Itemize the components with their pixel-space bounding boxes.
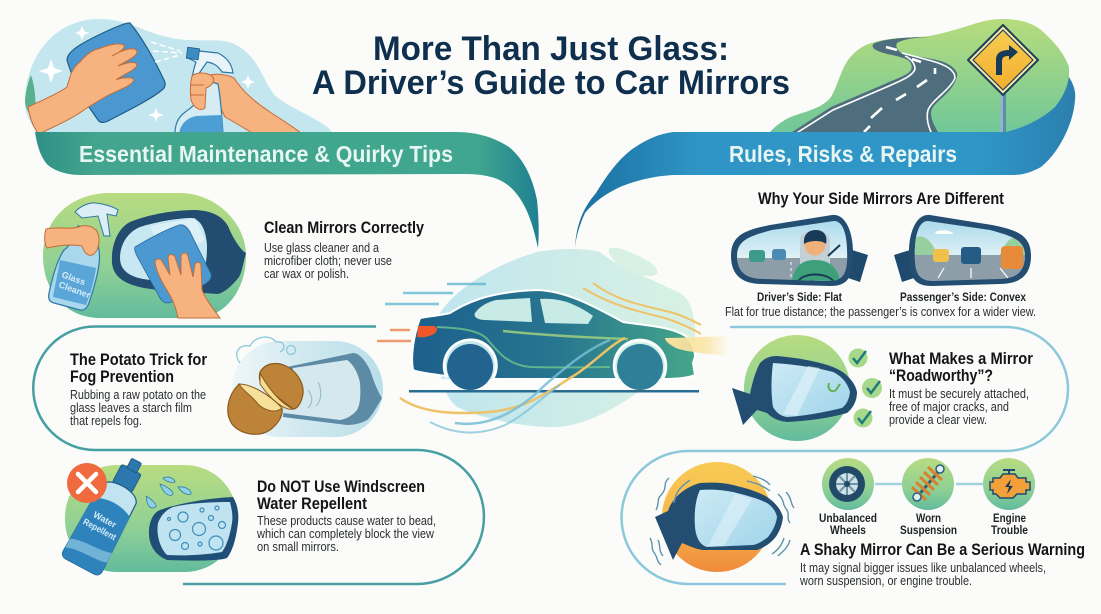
potato half lower <box>228 384 282 434</box>
icon captions: Engine <box>993 511 1026 525</box>
illustration: shaking mirror <box>650 462 794 572</box>
cleaning hand <box>155 253 220 318</box>
mirror <box>112 210 246 294</box>
heading and text <box>264 219 425 281</box>
heading and text <box>799 541 1085 588</box>
potato half upper <box>259 364 303 409</box>
spray mist and sparkles <box>39 26 255 122</box>
heading and text: that repels fog. <box>70 413 142 428</box>
icon captions: Unbalanced <box>819 511 877 525</box>
heading and text: It must be securely attached, <box>889 386 1029 401</box>
heading and text <box>70 351 208 428</box>
heading and text: Clean Mirrors Correctly <box>264 219 425 237</box>
road sign <box>968 25 1038 134</box>
heading and text: Rubbing a raw potato on the <box>70 387 206 402</box>
flowing swooshes <box>400 338 625 413</box>
heading and text: Use glass cleaner and a <box>264 240 380 255</box>
illustration: cleaning a mirror: Cleaner <box>57 279 92 300</box>
repellent bottle: Repellent <box>81 517 118 542</box>
repellent bottle <box>61 450 156 577</box>
connector lines <box>875 483 983 485</box>
heading and text: Water Repellent <box>257 495 367 513</box>
illustration: cleaning a mirror <box>43 193 246 318</box>
body stripes <box>437 327 610 367</box>
holding hand <box>45 226 99 255</box>
heading and text: which can completely block the view <box>256 526 435 541</box>
icon captions: Suspension <box>900 523 957 537</box>
heading and text: What Makes a Mirror <box>889 350 1034 368</box>
heading and text: Do NOT Use Windscreen <box>257 478 425 496</box>
main title <box>312 30 790 102</box>
spray bottle with hand <box>175 47 302 134</box>
main title: More Than Just Glass: <box>373 30 729 68</box>
icon: worn suspension <box>902 458 954 510</box>
panel: windscreen water repellent warning <box>61 450 436 577</box>
icon: engine trouble <box>983 458 1035 510</box>
driver side mirror <box>731 215 868 286</box>
panel: shaky mirror <box>650 458 1085 588</box>
panel: potato trick <box>33 326 484 584</box>
heading and text: The Potato Trick for <box>70 351 208 369</box>
speed lines <box>385 284 486 304</box>
blue cloth <box>135 225 211 303</box>
icon: unbalanced wheel <box>822 458 874 510</box>
tail light <box>417 326 437 337</box>
heading and text: It may signal bigger issues like unbalanced wheels, <box>800 560 1046 575</box>
central car illustration <box>377 248 730 433</box>
headlight beam <box>665 336 730 356</box>
banner: rules risks repairs: Rules, Risks & Repairs <box>729 141 957 167</box>
car body <box>412 290 695 379</box>
heading and text: These products cause water to bead, <box>257 513 436 528</box>
illustration: hands cleaning with cloth and spray <box>25 19 333 134</box>
mirror captions: Passenger’s Side: Convex <box>900 290 1026 304</box>
banner: essential maintenance: Essential Maintenance & Quirky Tips <box>79 141 453 167</box>
banner: rules risks repairs <box>575 77 1075 248</box>
panel: roadworthy <box>622 327 1068 584</box>
water drops and mist <box>146 477 191 509</box>
ground line <box>409 390 699 392</box>
illustration: repellent bottle and beaded mirror <box>61 450 238 577</box>
icon: red cross warning <box>67 463 107 503</box>
illustration: cleaning a mirror: Glass <box>60 269 87 287</box>
mirror captions: Driver’s Side: Flat <box>757 290 842 304</box>
heading and text: on small mirrors. <box>257 539 339 554</box>
illustration: roadworthy mirror with checks <box>732 335 882 441</box>
heading: Why Your Side Mirrors Are Different <box>758 190 1004 208</box>
road <box>789 37 957 134</box>
glass cleaner bottle <box>49 226 100 310</box>
heading and text: provide a clear view. <box>889 412 987 427</box>
illustration: potato on mirror <box>228 337 383 437</box>
panel: why side mirrors differ <box>725 190 1036 319</box>
icon captions: Worn <box>916 511 941 525</box>
beaded mirror <box>149 497 238 561</box>
heading and text <box>889 350 1034 427</box>
heading and text: “Roadworthy”? <box>889 367 993 385</box>
wheels <box>444 340 666 378</box>
icon captions: Trouble <box>991 523 1028 537</box>
passenger side mirror <box>894 215 1031 286</box>
heading and text: worn suspension, or engine trouble. <box>799 573 972 588</box>
heading and text: Fog Prevention <box>70 368 174 386</box>
heading and text: free of major cracks, and <box>889 399 1009 414</box>
right panel outline <box>622 327 1068 584</box>
potato panel outline <box>33 326 484 584</box>
repellent bottle: Water <box>92 509 118 530</box>
heading and text: glass leaves a starch film <box>70 400 192 415</box>
mirror captions <box>725 290 1036 319</box>
panel: clean mirrors correctly <box>43 193 425 318</box>
car windows <box>475 298 532 322</box>
banner: essential maintenance <box>35 132 539 248</box>
heading and text <box>256 478 436 554</box>
icon captions <box>819 511 1028 537</box>
main title: A Driver’s Guide to Car Mirrors <box>312 64 790 102</box>
mirror captions: Flat for true distance; the passenger’s is convex for a wider view. <box>725 304 1036 319</box>
heading and text: car wax or polish. <box>264 266 349 281</box>
icon captions: Wheels <box>830 523 866 537</box>
heading and text: microfiber cloth; never use <box>264 253 392 268</box>
illustration: winding road and sign <box>768 19 1069 134</box>
